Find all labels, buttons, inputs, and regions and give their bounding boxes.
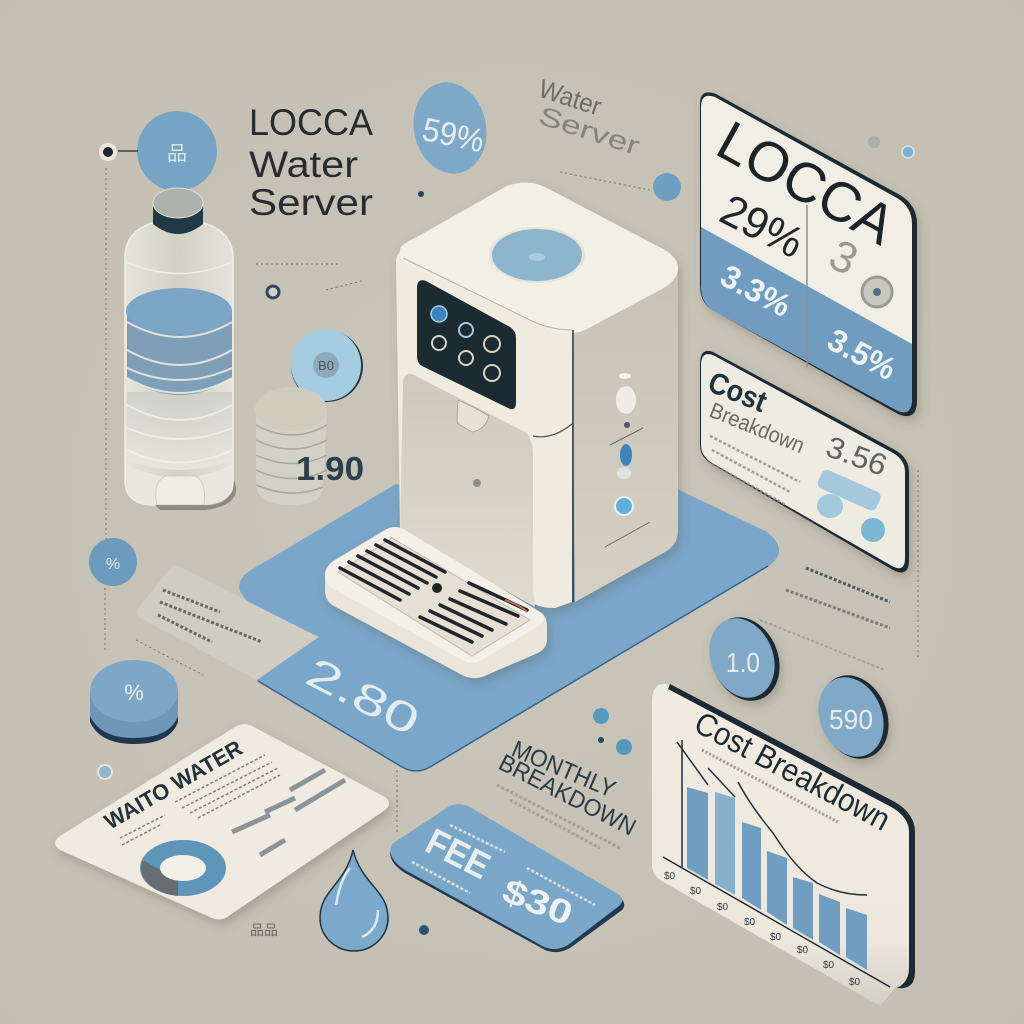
panel: cost breakdown chart: $0	[664, 871, 676, 882]
icon: top percent badge	[405, 76, 495, 180]
panel: grey note	[138, 565, 318, 680]
panel: water document: WAITO WATER	[100, 735, 247, 834]
faded subtitle: Water	[535, 73, 606, 122]
panel: cost breakdown chart: $0	[823, 960, 835, 971]
icon: blue puck: %	[124, 680, 144, 705]
panel: LOCCA pricing card: LOCCA	[707, 108, 906, 257]
spout	[457, 400, 489, 432]
server front body	[396, 250, 572, 608]
caption: right small text	[760, 568, 890, 670]
faded subtitle: Server	[535, 100, 644, 161]
panel: cost breakdown chart	[652, 684, 915, 1006]
panel: cost breakdown chart: Cost Breakdown	[689, 704, 896, 838]
bar chart	[687, 787, 867, 970]
icon: water bottle	[125, 188, 236, 510]
dotted guide lines	[105, 168, 918, 832]
drip tray	[325, 527, 547, 678]
small decor dots: 品品	[250, 922, 278, 938]
heading: monthly breakdown: BREAKDOWN	[494, 749, 640, 841]
panel: cost breakdown chart: $0	[770, 932, 782, 943]
icon: blue puck	[90, 660, 178, 744]
icon: blue small badge: %	[106, 556, 120, 573]
icon: top percent badge: 59%	[419, 110, 488, 159]
panel: cost breakdown chart: $0	[690, 886, 702, 897]
dispenser cavity	[400, 374, 535, 607]
panel: LOCCA pricing card: 3	[821, 230, 866, 285]
panel: LOCCA pricing card: 29%	[712, 185, 811, 268]
base mat	[240, 485, 779, 771]
panel: LOCCA pricing card: 3.3%	[715, 257, 797, 324]
icon: price badges	[698, 607, 901, 769]
water server	[325, 182, 678, 678]
panel: fee card: $30	[497, 872, 578, 933]
panel: cost breakdown card: Breakdown	[706, 397, 808, 458]
title: Server	[249, 182, 373, 223]
panel: cost breakdown card: 3.56	[822, 431, 891, 483]
icon: small target	[98, 765, 112, 779]
panel: cost breakdown chart: $0	[849, 977, 861, 988]
panel: fee card: FEE	[419, 821, 497, 887]
panel: LOCCA pricing card: 3.5%	[822, 321, 902, 387]
indicator dot	[473, 479, 481, 487]
small decor dots	[250, 708, 632, 938]
panel: cost breakdown chart: $0	[797, 945, 809, 956]
icon: blue small badge	[89, 538, 137, 586]
icon: top-left blue badge: 品	[167, 143, 187, 165]
panel: water document	[55, 724, 389, 919]
panel: cost breakdown card	[700, 351, 909, 572]
side indicators	[605, 373, 650, 547]
panel: fee card	[390, 804, 624, 952]
icon: price badges: 1.0	[726, 647, 760, 678]
control panel	[417, 280, 516, 409]
icon: small dot badges	[418, 136, 914, 201]
faded subtitle	[535, 73, 644, 161]
icon: small badge and coin stack	[255, 286, 371, 505]
title: Water	[249, 144, 358, 185]
server top	[400, 182, 678, 334]
panel: LOCCA pricing card	[700, 92, 917, 416]
panel: cost breakdown card: Cost	[703, 366, 771, 419]
title	[249, 102, 373, 223]
icon: top-left blue badge	[99, 111, 217, 191]
top disc	[489, 227, 585, 283]
heading: monthly breakdown: MONTHLY	[508, 736, 619, 804]
icon: price badges: 590	[829, 704, 873, 735]
mat lower edge	[258, 566, 768, 771]
panel: cost breakdown chart: $0	[744, 917, 756, 928]
title: LOCCA	[249, 102, 373, 143]
icon: small badge and coin stack: B0	[318, 358, 334, 373]
panel: cost breakdown chart: $0	[717, 902, 729, 913]
icon: water drop	[320, 850, 388, 951]
icon: small badge and coin stack: 1.90	[296, 450, 364, 487]
mat price: 2.80	[299, 648, 427, 744]
server right face	[572, 268, 678, 602]
